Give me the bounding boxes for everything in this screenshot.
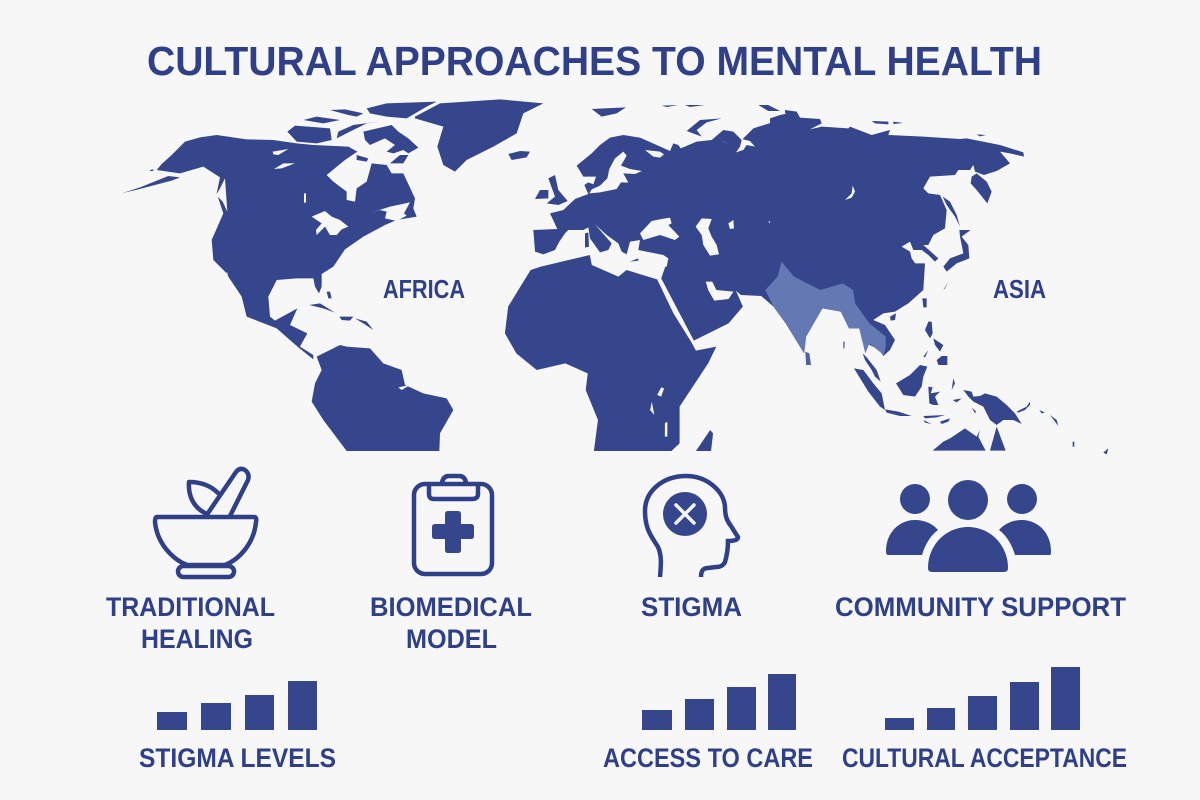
map: Africa — [505, 255, 716, 451]
label: Biomedical Model: MODEL — [406, 624, 497, 654]
map: South-West Asia — [661, 267, 869, 353]
map: Europe and western Russia — [533, 105, 790, 282]
icon: community group — [886, 480, 1051, 572]
icon: clipboard with medical cross — [414, 476, 492, 574]
bar chart: access to care — [642, 674, 796, 730]
label: Traditional Healing: TRADITIONAL — [106, 592, 275, 622]
icon: mortar and pestle — [155, 469, 256, 577]
South America — [312, 345, 453, 451]
label: Stigma: STIGMA — [641, 592, 742, 622]
label: Traditional Healing — [106, 592, 275, 654]
label: Biomedical Model — [370, 592, 532, 654]
label: Traditional Healing: HEALING — [141, 624, 253, 654]
label: Asia: ASIA — [993, 274, 1046, 304]
icon: head with X — [645, 476, 738, 577]
map: eastern Russia, China and Far East — [770, 110, 1024, 275]
map: highlighted South Asia region — [765, 262, 886, 365]
label: Community Support: COMMUNITY SUPPORT — [835, 592, 1126, 622]
Arctic islands — [287, 126, 332, 143]
label: Stigma Levels: STIGMA LEVELS — [139, 743, 336, 773]
bar chart: stigma levels — [157, 681, 317, 730]
bar chart: cultural acceptance — [885, 667, 1080, 730]
label: Biomedical Model: BIOMEDICAL — [370, 592, 532, 622]
title: CULTURAL APPROACHES TO MENTAL HEALTH — [147, 38, 1042, 84]
label: Access to Care: ACCESS TO CARE — [603, 743, 813, 773]
map: Americas and Greenland — [122, 99, 543, 451]
label: Africa: AFRICA — [383, 274, 465, 304]
map: South-East Asia and Oceania — [838, 263, 1108, 454]
label: Cultural Acceptance: CULTURAL ACCEPTANCE — [842, 743, 1127, 773]
world map — [122, 99, 1108, 454]
Greenland — [415, 99, 543, 172]
